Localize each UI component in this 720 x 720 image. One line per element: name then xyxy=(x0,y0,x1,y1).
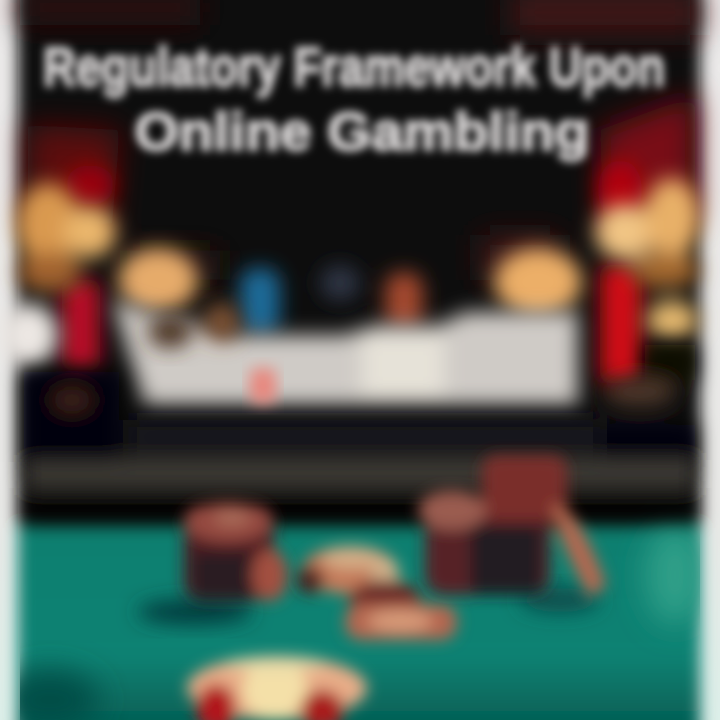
leaning chip xyxy=(552,505,606,598)
left chip stack xyxy=(184,502,288,602)
red curtain highlights xyxy=(62,160,642,383)
right chip stack xyxy=(418,455,606,598)
pink card xyxy=(250,368,276,404)
white table cloth band xyxy=(112,300,578,405)
title: Online Gambling xyxy=(134,102,590,162)
people in the background xyxy=(240,265,423,334)
title xyxy=(43,35,665,162)
dark table rail xyxy=(24,345,695,518)
left white cloth xyxy=(0,303,58,367)
poker chips xyxy=(137,455,606,720)
green table felt xyxy=(18,528,700,720)
felt shading xyxy=(0,525,705,720)
chip shadows xyxy=(137,588,600,624)
brown figures over cloth xyxy=(148,302,240,348)
centre chips xyxy=(296,546,457,640)
red curtains xyxy=(20,0,700,280)
front chip xyxy=(187,656,367,720)
lamps xyxy=(16,178,700,340)
